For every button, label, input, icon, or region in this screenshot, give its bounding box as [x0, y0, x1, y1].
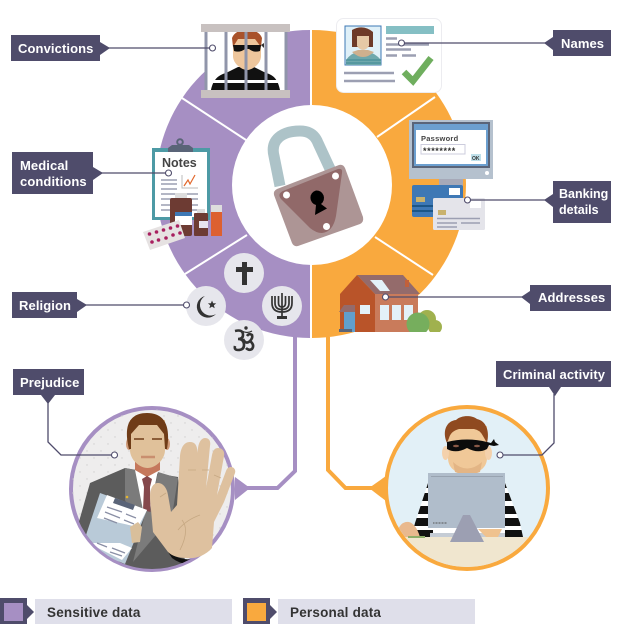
medicine bottles	[175, 193, 187, 198]
panel: criminal activity illustration	[385, 407, 550, 572]
password text: Password	[421, 134, 459, 143]
centre white circle	[232, 105, 392, 265]
crescent and star	[186, 286, 226, 326]
label: Criminal activity: Criminal activity	[503, 367, 606, 382]
neck	[135, 462, 160, 476]
pill pack	[143, 220, 185, 250]
icon: medical notes	[143, 139, 222, 250]
icon: computer and bank cards: OK	[472, 156, 480, 162]
label: Medical conditions	[12, 152, 172, 194]
label: Banking details	[464, 181, 611, 223]
suit	[78, 468, 186, 575]
label: Convictions: Convictions	[18, 41, 94, 56]
left hand	[397, 522, 420, 537]
blue bank card	[412, 185, 463, 217]
tie	[142, 476, 152, 512]
label: Banking details: details	[559, 203, 599, 217]
label: Addresses	[382, 285, 611, 311]
keyboard and hand	[433, 530, 505, 533]
label: Prejudice	[13, 369, 118, 458]
pie: data wheel	[156, 30, 466, 338]
raised hand	[150, 438, 235, 558]
white bank card	[433, 198, 485, 230]
head	[126, 439, 130, 450]
face	[448, 426, 487, 474]
label: Names	[398, 30, 611, 56]
legend: sensitive data: Sensitive data	[47, 605, 141, 620]
legend: personal data	[243, 598, 475, 624]
check mark	[404, 58, 431, 81]
label: Medical conditions: Medical	[20, 158, 68, 173]
label: Prejudice: Prejudice	[20, 375, 79, 390]
sleeve cuff	[168, 552, 190, 563]
icon: ID card	[336, 18, 442, 92]
om symbol	[224, 320, 264, 360]
label: Medical conditions: conditions	[20, 174, 87, 189]
icon: computer and bank cards: ********	[423, 146, 456, 156]
icon: computer and bank cards	[409, 120, 493, 230]
panel: prejudice illustration	[70, 405, 235, 575]
legend: personal data: Personal data	[290, 605, 381, 620]
label: Religion	[12, 292, 190, 318]
striped top	[414, 483, 523, 537]
icon: prisoner behind bars	[201, 24, 290, 98]
label: Criminal activity	[496, 361, 611, 458]
label: Banking details: Banking	[559, 187, 608, 201]
personal data half	[312, 30, 466, 338]
menorah	[262, 286, 302, 326]
icon: house	[339, 275, 442, 336]
cross	[224, 253, 264, 293]
legend: sensitive data	[0, 598, 232, 624]
sensitive data half	[156, 30, 310, 338]
mask	[447, 439, 499, 451]
bush	[406, 310, 442, 332]
label: Addresses: Addresses	[538, 290, 605, 305]
label: Convictions	[11, 35, 216, 61]
monitor	[428, 473, 505, 528]
clipboard	[82, 493, 147, 564]
label: Names: Names	[561, 36, 604, 51]
hair	[445, 416, 488, 443]
keyhole	[310, 190, 327, 215]
label: Religion: Religion	[19, 298, 71, 313]
desk	[405, 537, 529, 567]
connector: personal data	[328, 337, 386, 501]
notes title: Notes	[162, 156, 197, 170]
icon: padlock	[273, 131, 363, 246]
connector: sensitive data	[235, 337, 295, 500]
icon: religious symbols	[186, 253, 302, 360]
